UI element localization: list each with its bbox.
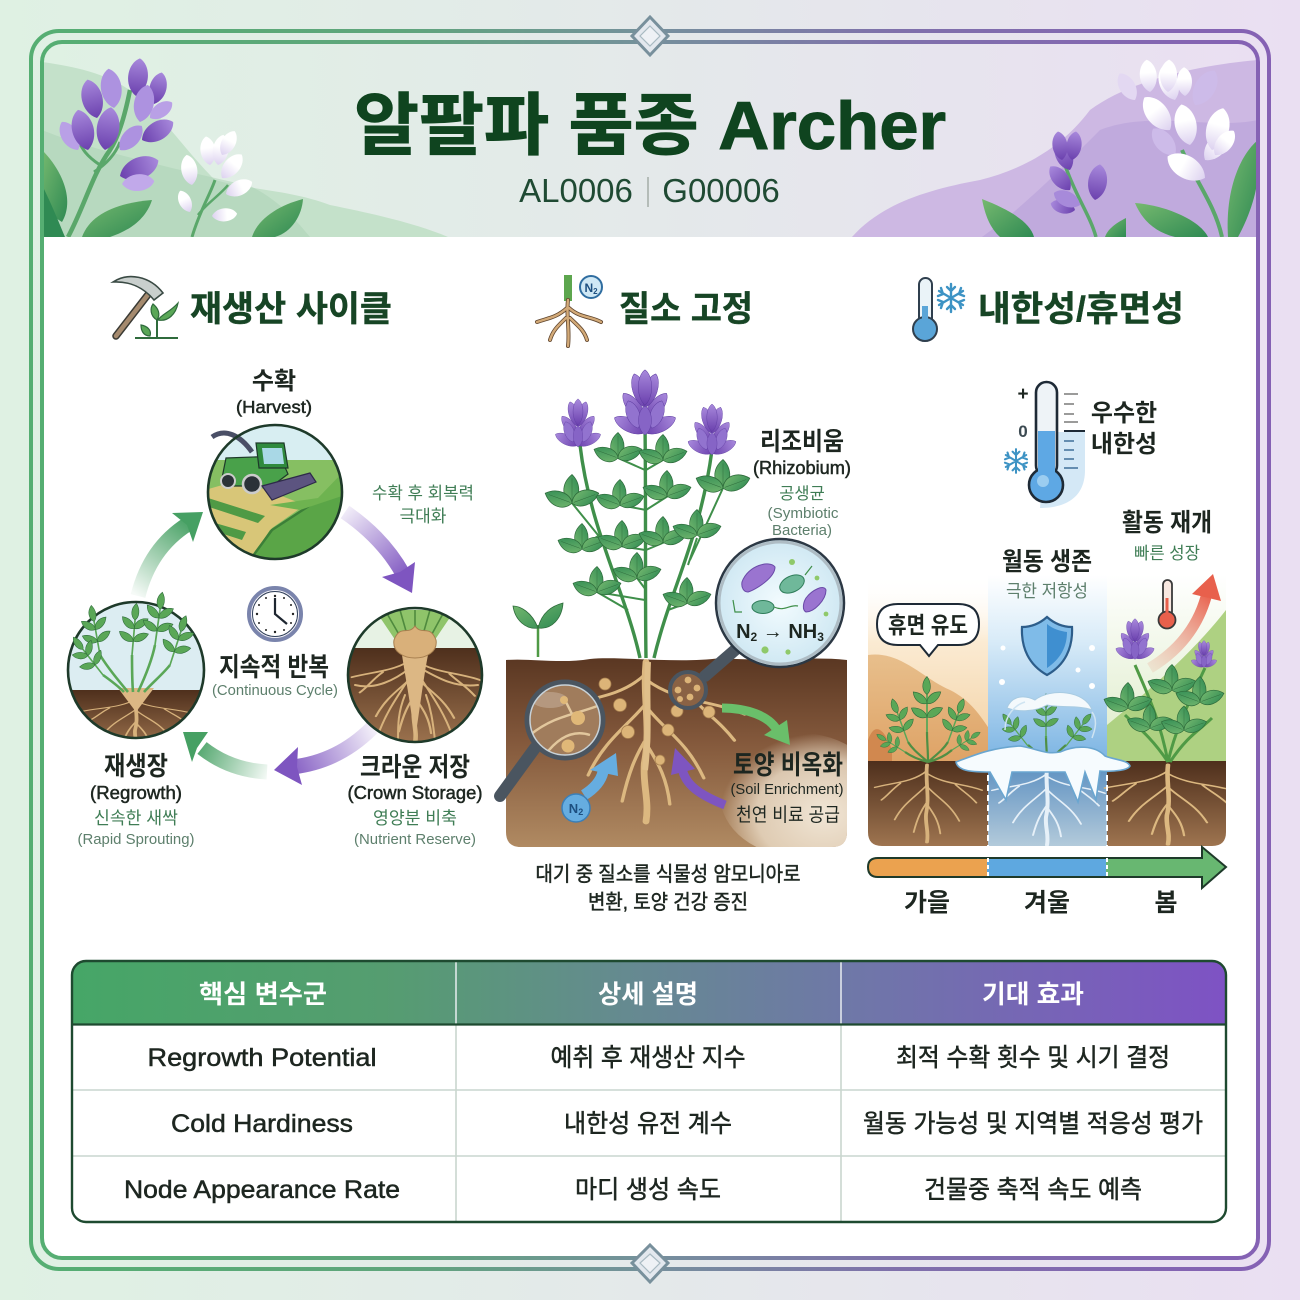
icon: crown storage circle <box>346 606 484 744</box>
magnifier: rhizobium bacteria: → NH <box>757 621 817 643</box>
label: rhizobium: 리조비움 <box>760 428 844 456</box>
caption: 대기 중 질소를 식물성 암모니아로 <box>536 863 800 886</box>
row: node appearance rate: Node Appearance Rate <box>124 1176 400 1204</box>
icon: harvest field circle <box>206 424 344 560</box>
arrow: nitrogen into root <box>584 753 618 795</box>
label: rhizobium: Bacteria) <box>772 523 832 539</box>
magnifier: rhizobium bacteria: 2 <box>751 630 758 644</box>
icon: roots with N2 badge: 2 <box>593 287 598 296</box>
icon: clock <box>249 588 301 640</box>
heading: nitrogen fixation <box>537 275 753 346</box>
soil enrichment glow <box>724 735 847 847</box>
label: excellent hardiness <box>1091 400 1157 458</box>
label: soil enrichment: 토양 비옥화 <box>733 750 843 780</box>
caption <box>536 863 800 914</box>
icon: N2 bubble: 2 <box>578 807 583 817</box>
label: crown storage: (Crown Storage) <box>348 783 482 803</box>
row: node appearance rate <box>124 1176 1142 1204</box>
arrow: warming growth <box>1150 574 1221 668</box>
label: excellent hardiness: 내한성 <box>1091 431 1157 458</box>
magnifier: rhizobium bacteria: 3 <box>817 630 824 644</box>
title: 알팔파 품종 Archer <box>354 88 946 164</box>
table: key variables <box>72 961 1226 1222</box>
ornament: top diamond <box>632 17 668 55</box>
subtitle codes: AL0006 <box>519 172 633 209</box>
alfalfa plant <box>542 370 752 658</box>
row: regrowth potential <box>148 1044 1170 1072</box>
label: harvest: (Harvest) <box>236 397 312 417</box>
magnifier: rhizobium bacteria: N <box>736 621 751 643</box>
panel: nitrogen fixation diagram <box>500 370 880 914</box>
label: recovery note: 수확 후 회복력 <box>372 484 474 503</box>
row: regrowth potential: 예취 후 재생산 지수 <box>550 1044 746 1072</box>
label: continuous cycle: 지속적 반복 <box>219 652 329 682</box>
season labels <box>904 889 1178 917</box>
thermometer gauge: + <box>1017 384 1029 405</box>
season labels: 봄 <box>1154 889 1178 917</box>
label: recovery note: 극대화 <box>400 507 447 526</box>
header labels <box>199 981 1084 1009</box>
ornament: bottom diamond <box>632 1245 668 1282</box>
icon: scythe and sprout <box>113 277 178 338</box>
heading: nitrogen fixation: 질소 고정 <box>619 290 753 329</box>
label: harvest: 수확 <box>252 368 296 395</box>
roots and nodules <box>552 662 745 822</box>
label: activity resume: 빠른 성장 <box>1134 544 1200 563</box>
label: harvest <box>236 368 312 417</box>
heading: regrowth cycle: 재생산 사이클 <box>190 290 392 329</box>
label: rhizobium: (Symbiotic <box>768 506 838 522</box>
magnifier: left root detail <box>500 682 603 796</box>
row: cold hardiness: 월동 가능성 및 지역별 적응성 평가 <box>863 1110 1203 1138</box>
magnifier: rhizobium bacteria <box>670 539 844 708</box>
caption: 변환, 토양 건강 증진 <box>588 891 748 914</box>
label: crown storage <box>348 752 482 848</box>
season panels <box>868 575 1235 847</box>
row: regrowth potential: 최적 수확 횟수 및 시기 결정 <box>896 1044 1170 1072</box>
label: regrowth: 재생장 <box>104 751 168 781</box>
icon: N2 bubble <box>562 794 590 822</box>
arrow: regrowth back <box>183 732 267 772</box>
label: activity resume: 활동 재개 <box>1122 509 1212 537</box>
arrow: crown to regrowth <box>274 728 372 785</box>
header labels: 상세 설명 <box>598 981 698 1009</box>
label: regrowth: (Regrowth) <box>90 783 182 803</box>
row: cold hardiness: 내한성 유전 계수 <box>564 1110 732 1138</box>
spring plant <box>1102 619 1226 762</box>
table header <box>72 961 1226 1024</box>
label: crown storage: (Nutrient Reserve) <box>354 832 476 848</box>
label: continuous cycle <box>212 652 338 699</box>
heading: cold hardiness and dormancy: 내한성/휴면성 <box>978 290 1184 329</box>
label: soil enrichment <box>730 750 844 826</box>
autumn plant <box>871 676 986 762</box>
icon: regrowth circle <box>66 592 206 740</box>
panel: regrowth cycle diagram <box>60 368 490 848</box>
label: rhizobium: 공생균 <box>779 484 825 503</box>
label: excellent hardiness: 우수한 <box>1091 400 1157 427</box>
label: regrowth <box>78 751 194 848</box>
label: recovery note <box>372 484 474 526</box>
season labels: 겨울 <box>1024 889 1070 917</box>
arrow: regrowth to harvest <box>138 512 203 596</box>
icon: roots with N2 badge: N <box>584 281 593 295</box>
label: activity resume <box>1122 509 1212 563</box>
label: winter survival <box>1002 548 1092 601</box>
label: crown storage: 크라운 저장 <box>360 752 470 782</box>
label: rhizobium <box>753 428 851 539</box>
thermometer gauge <box>1005 382 1085 508</box>
row: cold hardiness <box>171 1110 1203 1138</box>
header band <box>42 42 1258 237</box>
heading: regrowth cycle <box>113 277 392 338</box>
winter snow and plant <box>956 693 1130 802</box>
thermometer gauge: 0 <box>1018 422 1028 441</box>
row: cold hardiness: Cold Hardiness <box>171 1110 353 1138</box>
subtitle codes: G00006 <box>662 172 780 209</box>
arrow: harvest to crown <box>345 512 415 593</box>
callout: dormancy induction <box>877 604 979 656</box>
season labels: 가을 <box>904 889 950 917</box>
label: winter survival: 극한 저항성 <box>1006 581 1088 601</box>
row: node appearance rate: 마디 생성 속도 <box>575 1176 721 1204</box>
label: soil enrichment: 천연 비료 공급 <box>736 804 840 826</box>
icon: N2 bubble: N <box>569 801 578 816</box>
label: rhizobium: (Rhizobium) <box>753 458 851 478</box>
callout: dormancy induction: 휴면 유도 <box>888 612 968 638</box>
label: winter survival: 월동 생존 <box>1002 548 1092 576</box>
seedling <box>513 603 563 657</box>
icon: roots with N2 badge <box>537 275 602 346</box>
subtitle codes <box>519 172 780 209</box>
label: soil enrichment: (Soil Enrichment) <box>730 782 844 798</box>
table background <box>72 961 1226 1222</box>
header labels: 핵심 변수군 <box>199 981 327 1009</box>
arrow: green to soil <box>722 708 790 745</box>
label: regrowth: (Rapid Sprouting) <box>78 832 194 848</box>
arrow: purple to nodule <box>671 748 725 805</box>
row: regrowth potential: Regrowth Potential <box>148 1044 376 1072</box>
header labels: 기대 효과 <box>982 981 1084 1009</box>
soil block <box>506 658 847 847</box>
illustration: left header flowers <box>42 57 303 237</box>
illustration: right header flowers <box>982 59 1258 237</box>
label: regrowth: 신속한 새싹 <box>94 808 178 828</box>
label: continuous cycle: (Continuous Cycle) <box>212 683 338 699</box>
icon: thermometer and snowflake <box>913 278 964 341</box>
icon: warm thermometer <box>1158 580 1176 628</box>
row: node appearance rate: 건물중 축적 속도 예측 <box>924 1176 1142 1204</box>
label: crown storage: 영양분 비축 <box>373 808 457 828</box>
panel: dormancy and cold hardiness <box>868 382 1235 917</box>
season timeline arrow <box>868 847 1226 888</box>
icon: shield <box>1022 617 1072 675</box>
heading: cold hardiness and dormancy <box>913 278 1184 341</box>
